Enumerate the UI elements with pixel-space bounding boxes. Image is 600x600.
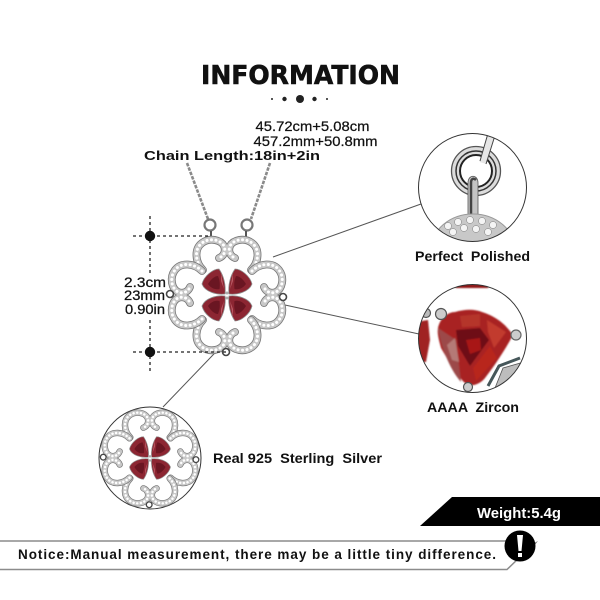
title: INFORMATION xyxy=(201,61,400,91)
weight banner xyxy=(420,497,600,526)
chain length text xyxy=(144,118,378,163)
label: sterling silver: Real 925 Sterling Silver xyxy=(213,451,383,466)
chain length text: Chain Length:18in+2in xyxy=(144,148,320,163)
pendant xyxy=(166,220,286,356)
title dots xyxy=(271,95,328,103)
chain length text: 45.72cm+5.08cm xyxy=(256,118,370,134)
circle detail: polished clasp xyxy=(418,133,527,242)
circle detail: silver pendant xyxy=(99,407,201,509)
notice band: Notice:Manual measurement, there may be a little tiny difference. xyxy=(18,547,496,562)
label: zircon: AAAA Zircon xyxy=(427,399,519,415)
dimension text: 23mm xyxy=(124,288,165,303)
dimension text: 0.90in xyxy=(125,302,165,317)
chain length text: 457.2mm+50.8mm xyxy=(254,133,378,149)
icon: warning exclamation xyxy=(504,530,536,562)
notice band xyxy=(0,541,538,570)
dimension text: 2.3cm xyxy=(124,275,166,290)
dimension marker: pendant height xyxy=(133,216,226,373)
circle detail: zircon gem xyxy=(416,284,526,392)
leader lines xyxy=(163,204,421,407)
necklace chain xyxy=(187,163,270,219)
dimension text xyxy=(124,275,166,317)
label: perfect polished: Perfect Polished xyxy=(415,248,530,264)
weight banner: Weight:5.4g xyxy=(477,506,561,522)
